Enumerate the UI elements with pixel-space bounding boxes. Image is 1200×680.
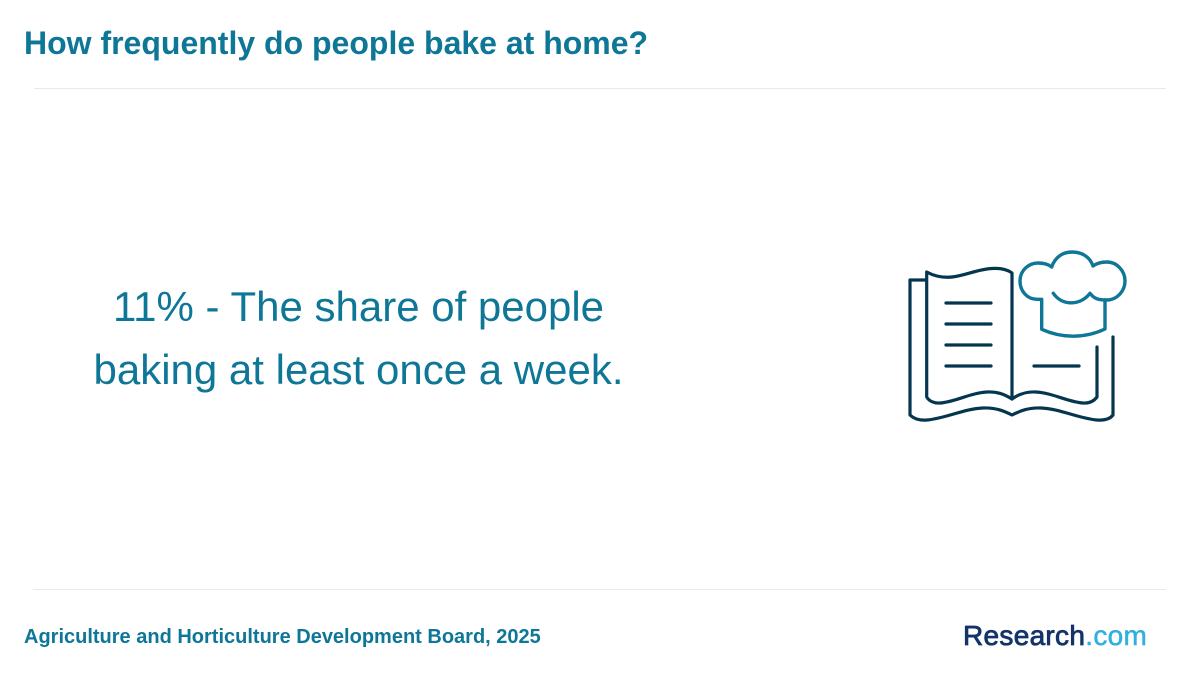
title: How frequently do people bake at home? [24,25,648,61]
main statistic text: baking at least once a week. [93,346,624,393]
main statistic text: 11% - The share of people [113,283,604,330]
main statistic text [93,283,624,393]
chef hat [1020,252,1125,336]
logo: Research.com: Research.com [963,620,1147,651]
book outline [910,268,1113,420]
icon: recipe book with chef hat [908,250,1127,422]
source note: Agriculture and Horticulture Development Board, 2025 [24,626,541,648]
